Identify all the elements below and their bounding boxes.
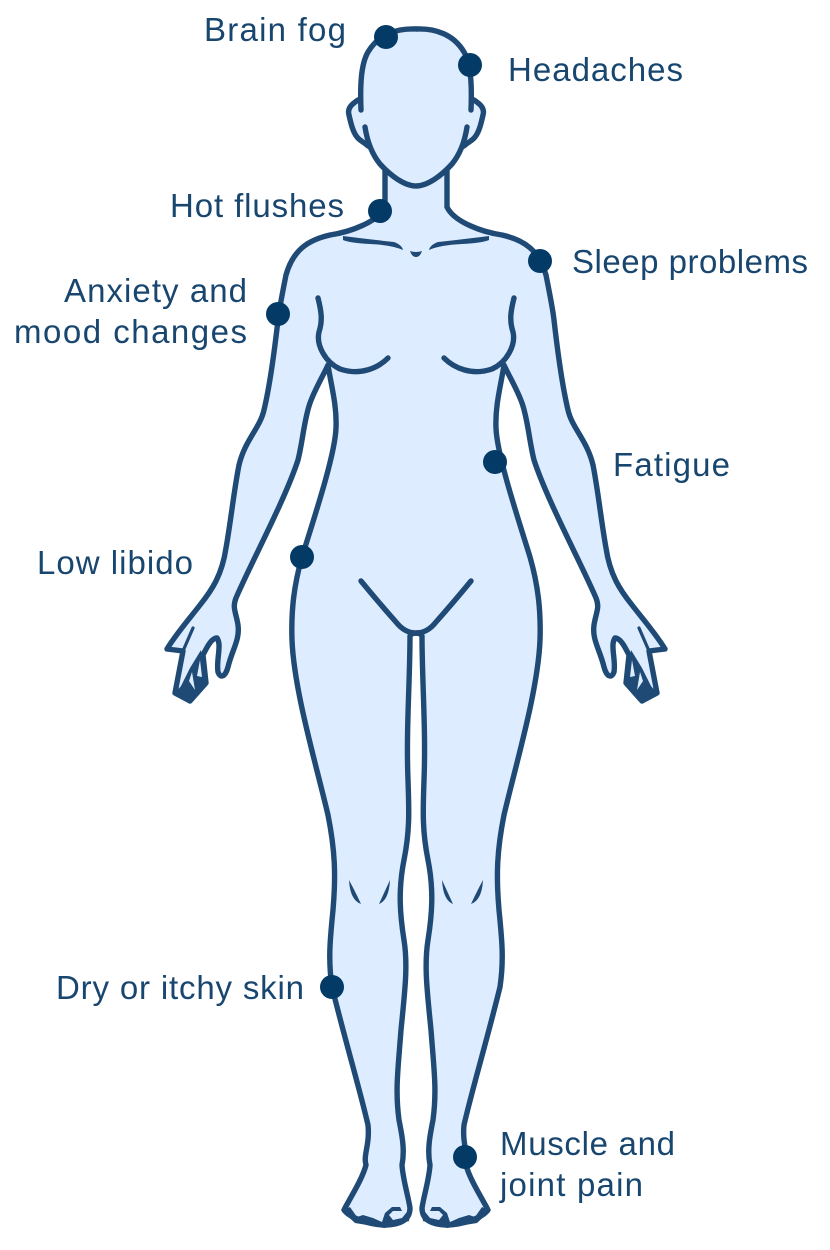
marker: fatigue <box>483 450 507 474</box>
left half of body <box>167 29 417 1228</box>
label: muscle and joint pain: Muscle and <box>500 1125 675 1162</box>
body silhouette <box>167 29 665 1228</box>
label: low libido: Low libido <box>37 544 193 581</box>
label: brain fog: Brain fog <box>204 11 346 48</box>
marker: sleep problems <box>528 249 552 273</box>
marker: low libido <box>290 545 314 569</box>
label: hot flushes: Hot flushes <box>170 187 344 224</box>
label: anxiety and mood changes <box>14 272 247 350</box>
marker: muscle and joint pain <box>453 1145 477 1169</box>
label: headaches: Headaches <box>508 51 683 88</box>
label: muscle and joint pain: joint pain <box>499 1166 643 1203</box>
marker: anxiety and mood changes <box>266 302 290 326</box>
label: sleep problems: Sleep problems <box>572 243 808 280</box>
marker: dry or itchy skin <box>320 975 344 999</box>
label: dry or itchy skin: Dry or itchy skin <box>56 969 304 1006</box>
right half of body <box>415 29 665 1228</box>
neck hollow mark <box>410 251 422 257</box>
label: anxiety and mood changes: Anxiety and <box>64 272 247 309</box>
label: fatigue: Fatigue <box>613 446 730 483</box>
label: muscle and joint pain <box>499 1125 675 1203</box>
label: anxiety and mood changes: mood changes <box>14 313 247 350</box>
marker: brain fog <box>374 25 398 49</box>
marker: headaches <box>458 53 482 77</box>
marker: hot flushes <box>368 199 392 223</box>
